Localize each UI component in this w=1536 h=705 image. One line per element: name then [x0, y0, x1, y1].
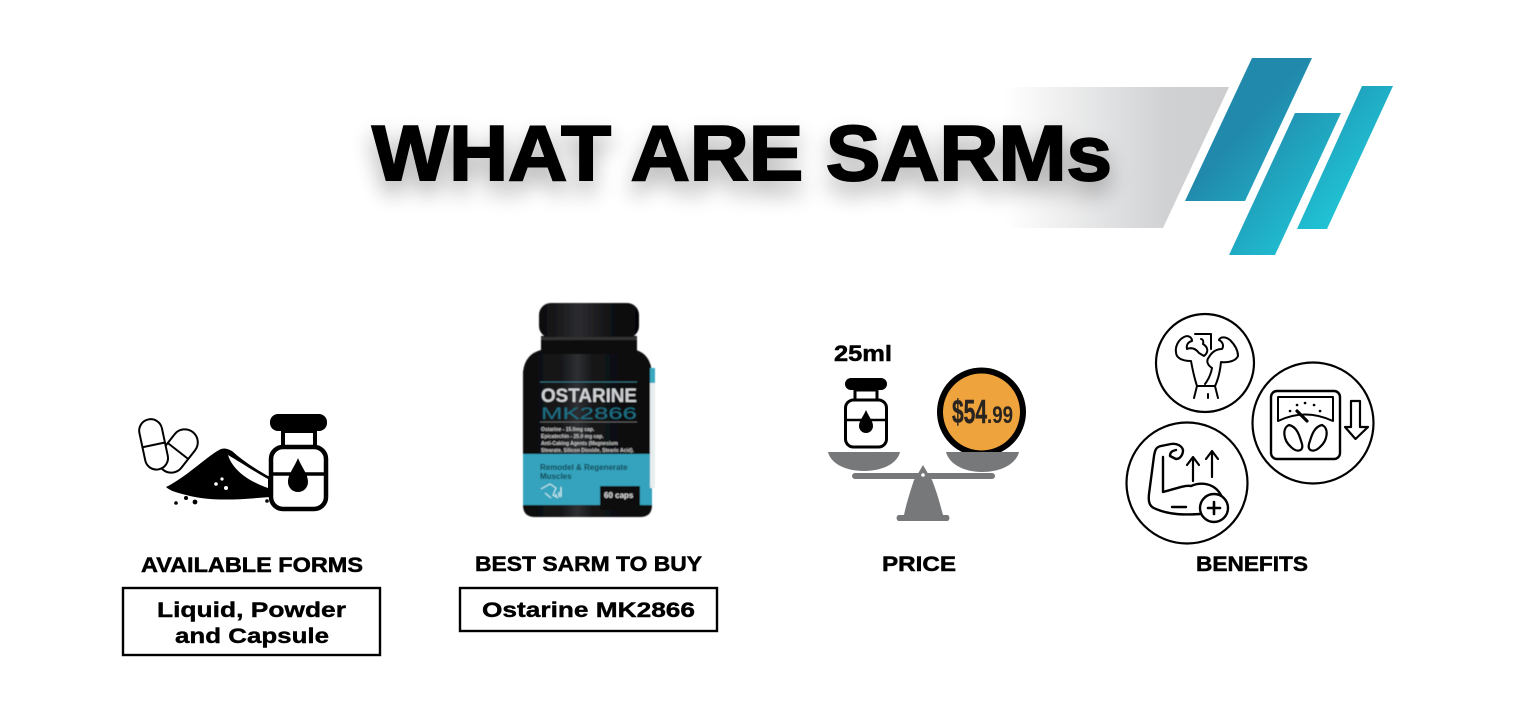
price coin	[940, 370, 1023, 454]
product bottle: Ostarine MK2866: 60 caps	[604, 491, 634, 500]
box: ostarine mk2866	[460, 588, 717, 631]
benefits icons	[1126, 314, 1374, 544]
box: ostarine mk2866: Ostarine MK2866	[482, 598, 695, 622]
product bottle: Ostarine MK2866: Stearate, Silicon Dioxide, Stearic Acid).	[541, 448, 635, 454]
title: WHAT ARE SARMs	[372, 121, 1112, 209]
capsules	[137, 417, 203, 478]
product bottle: Ostarine MK2866: Epicatechin - 25.0 mg cap.	[541, 434, 604, 440]
label: best sarm to buy: BEST SARM TO BUY	[475, 553, 702, 576]
label: available forms: AVAILABLE FORMS	[141, 554, 363, 577]
vial	[845, 378, 887, 447]
box: liquid, powder and capsule: Liquid, Powder	[157, 598, 347, 622]
product bottle: Ostarine MK2866: Ostarine - 15.0mg cap.	[541, 427, 595, 433]
title: WHAT ARE SARMs	[372, 109, 1112, 197]
product bottle: Ostarine MK2866: OSTARINE	[541, 386, 637, 407]
25ml label: 25ml	[834, 341, 892, 366]
label: benefits: BENEFITS	[1196, 553, 1308, 576]
product bottle: Ostarine MK2866: MK2866	[541, 404, 637, 423]
box: liquid, powder and capsule: and Capsule	[175, 624, 329, 648]
product bottle: Ostarine MK2866	[523, 303, 655, 517]
icon: weighing scale circle	[1252, 362, 1374, 484]
teal label band	[523, 454, 652, 505]
vial	[270, 414, 327, 509]
box: liquid, powder and capsule	[123, 588, 380, 655]
decorative teal slanted bars	[1185, 58, 1393, 255]
product bottle: Ostarine MK2866: Anti-Caking Agents (Magnesium	[541, 441, 618, 447]
icon: flexed arm circle	[1126, 422, 1248, 544]
label: price: PRICE	[882, 553, 956, 576]
icon: available forms (capsules, powder, vial)	[137, 414, 327, 509]
product bottle: Ostarine MK2866: Remodel & Regenerate	[540, 463, 628, 472]
product bottle: Ostarine MK2866: Muscles	[540, 472, 572, 481]
scale	[828, 452, 1019, 521]
price coin: .99	[987, 402, 1013, 429]
powder pile	[166, 448, 270, 500]
price coin: $54	[952, 393, 987, 430]
price scale illustration	[828, 341, 1023, 521]
icon: bodybuilder circle	[1156, 314, 1254, 412]
banner: grey gradient parallelogram	[1000, 87, 1229, 228]
